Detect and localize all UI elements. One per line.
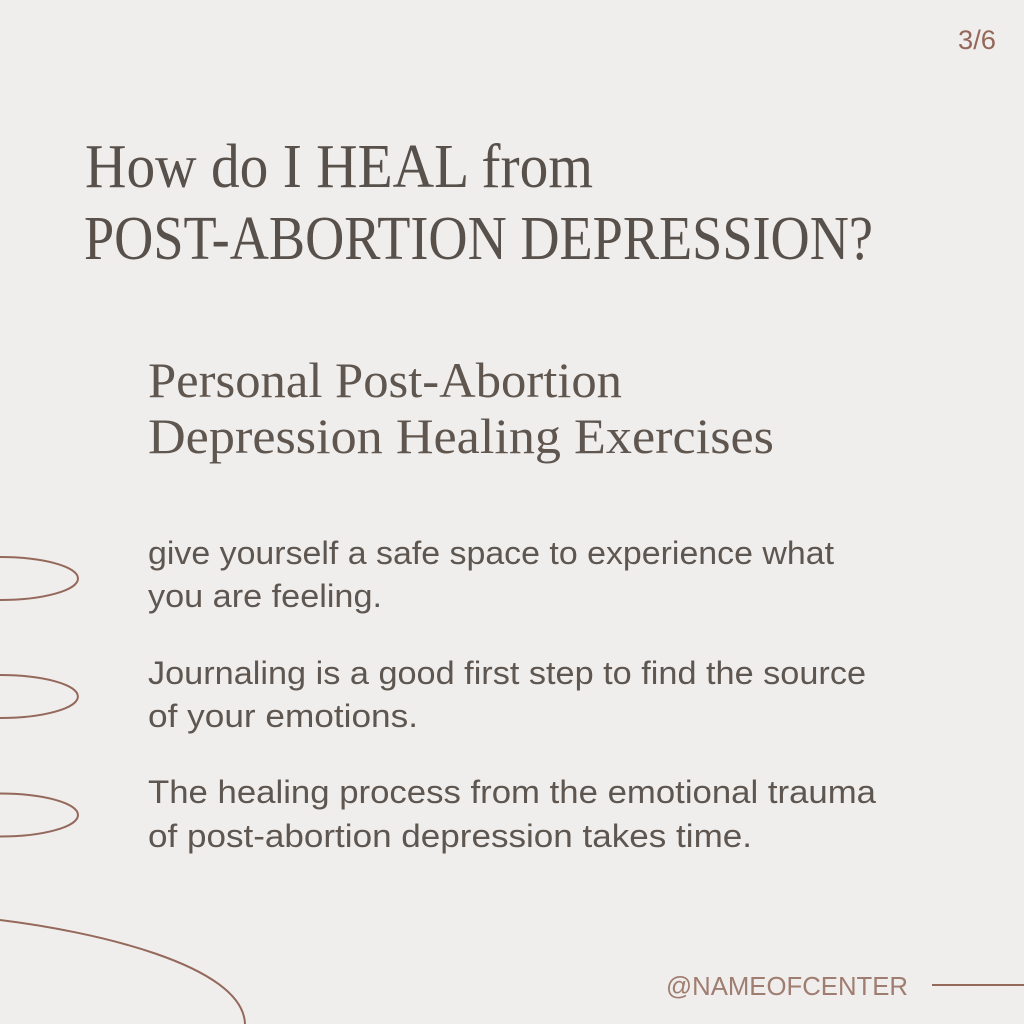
subheading: Personal Post-Abortion <box>148 352 622 408</box>
text block: journaling: Journaling is a good first step to find the source <box>148 655 866 691</box>
text block: journaling <box>148 655 866 734</box>
title <box>84 133 873 273</box>
text block: healing process: The healing process from the emotional trauma <box>148 774 876 810</box>
text block: safe space: you are feeling. <box>148 578 382 614</box>
footer line <box>932 984 1024 986</box>
footer handle: @NAMEOFCENTER <box>666 973 908 1001</box>
text block: journaling: of your emotions. <box>148 698 418 734</box>
title: POST-ABORTION DEPRESSION? <box>84 205 873 273</box>
subheading <box>148 352 774 464</box>
text block: safe space: give yourself a safe space to experience what <box>148 535 834 571</box>
title: How do I HEAL from <box>85 133 593 201</box>
text block: safe space <box>148 535 834 614</box>
text block: healing process: of post-abortion depression takes time. <box>148 818 752 854</box>
subheading: Depression Healing Exercises <box>148 408 774 464</box>
text block: healing process <box>148 774 876 854</box>
decorative ovals at left edge <box>0 557 245 1024</box>
page number: 3/6 <box>958 25 996 55</box>
